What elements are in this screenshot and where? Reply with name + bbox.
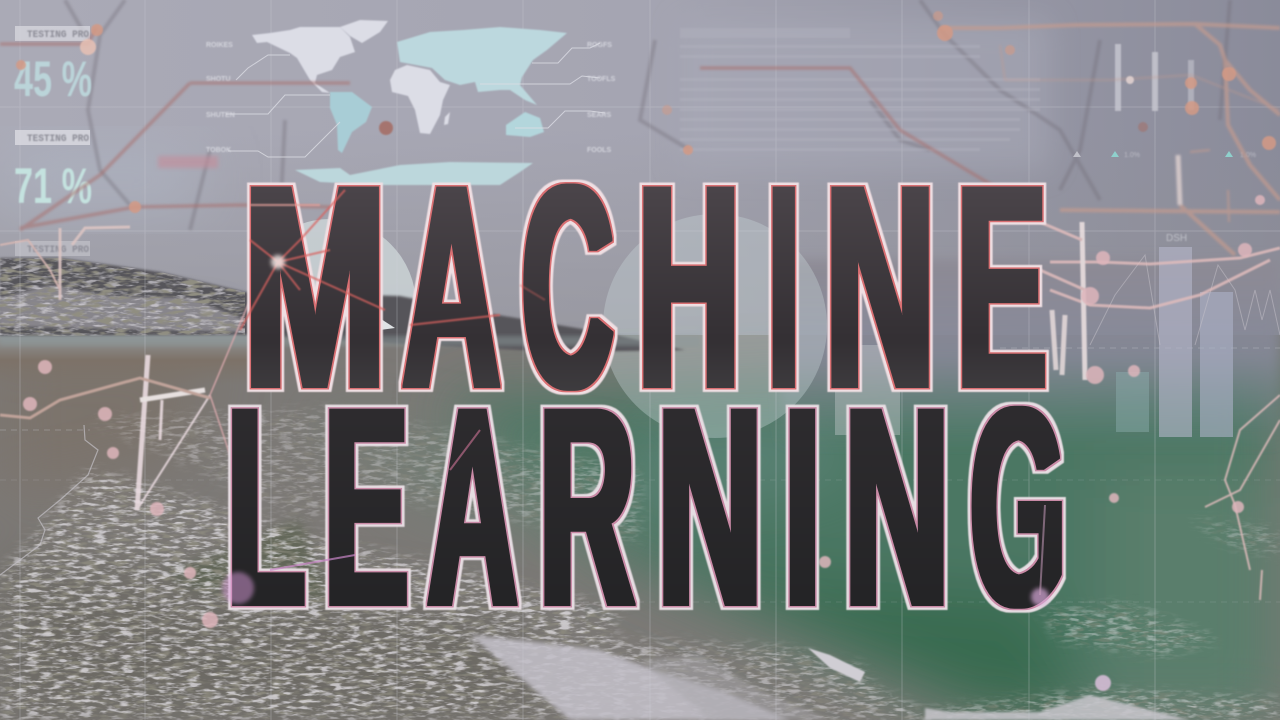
distant headland — [0, 256, 683, 352]
title line one: I — [769, 125, 798, 449]
panel: bar gauges and status markers — [1073, 44, 1256, 159]
readout: testing 71 percent: TESTING PRO — [27, 134, 89, 145]
white breaking wave — [470, 635, 1190, 720]
title: MACHINE LEARNING: E — [957, 125, 1047, 449]
pink nodes — [23, 195, 1265, 691]
title line two: N — [657, 349, 763, 666]
chart bars — [1116, 247, 1233, 437]
map region labels: TOOFLS — [587, 76, 616, 83]
world map — [206, 20, 616, 185]
circuit network: glowing left traces — [0, 227, 250, 510]
readout: testing 71 percent: 71 % — [14, 158, 92, 214]
translucent circles — [244, 214, 900, 438]
map leader lines — [226, 43, 605, 157]
status text: 1.0% — [1240, 152, 1256, 159]
readout: testing third label — [15, 241, 90, 256]
readout: testing 45 percent: 45 % — [14, 51, 92, 107]
background: sky haze and data panel field — [0, 0, 1280, 345]
pink highlight bar — [158, 156, 218, 168]
dark branch network behind panels — [65, 0, 1230, 230]
map region labels: TOBOK — [206, 147, 231, 154]
title line two: L — [227, 349, 305, 666]
title line one: M — [243, 125, 387, 449]
status text: 1.0% — [1124, 152, 1140, 159]
circuit network: top right — [940, 24, 1280, 255]
background: beach and green sea — [0, 260, 1280, 720]
title line two: E — [324, 349, 408, 666]
chart waveform — [1090, 255, 1280, 345]
chart label: DSH — [1166, 233, 1187, 244]
readout: testing 71 percent — [14, 130, 92, 214]
map region labels: ROIKES — [206, 42, 233, 49]
panel: testing readouts — [14, 26, 92, 256]
title line one: N — [825, 125, 936, 449]
title line two: I — [785, 349, 820, 666]
text: G — [970, 349, 1066, 666]
title line two: R — [539, 349, 635, 666]
map region labels — [206, 42, 616, 154]
status markers — [1073, 151, 1233, 157]
background: foam texture on the surf — [0, 406, 1280, 720]
title: MACHINE LEARNING — [227, 125, 1066, 666]
map region labels: SEARS — [587, 112, 611, 119]
readout: testing third label: TESTING PRO — [27, 245, 89, 256]
pink glow over the L and E — [222, 255, 1049, 606]
map region labels: FOOLS — [587, 147, 611, 154]
orange nodes — [16, 11, 1276, 213]
text block: faint data table — [680, 28, 1040, 151]
gauge bars — [1115, 44, 1194, 111]
title line one: A — [402, 125, 500, 449]
circuit network: dark red left traces — [0, 28, 1000, 230]
readout: testing 45 percent: TESTING PRO — [27, 30, 89, 41]
readout: testing 45 percent — [14, 26, 92, 107]
map region labels: ROGFS — [587, 42, 612, 49]
title line two: N — [844, 349, 950, 666]
title line one: H — [637, 125, 740, 449]
status text — [1124, 152, 1256, 159]
map continents — [252, 20, 567, 185]
map region labels: SHOTU — [206, 76, 230, 83]
circuit network: glowing pink traces right — [1035, 220, 1280, 600]
shoreline — [0, 425, 98, 575]
map region labels: SHUTEN — [206, 112, 235, 119]
panel: lower right bar chart — [1090, 233, 1280, 437]
red glowing traces over the title — [240, 190, 545, 330]
title line two: A — [428, 349, 518, 666]
title line one: C — [522, 125, 614, 449]
